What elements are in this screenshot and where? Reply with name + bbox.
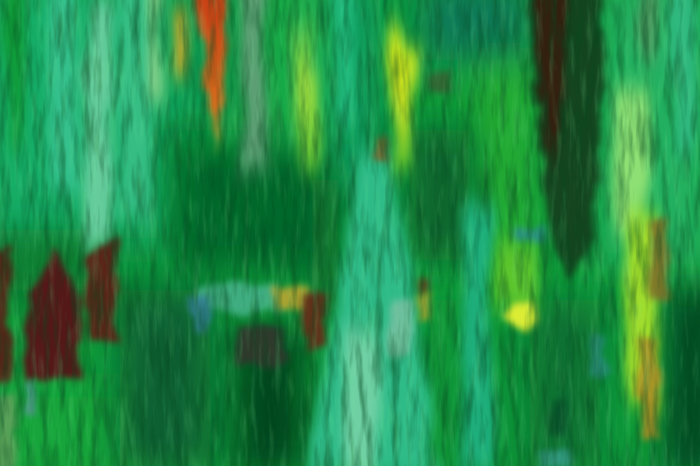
- patch: central teal and yellow band: [192, 284, 326, 366]
- brush streaks: yellow green strokes: [168, 5, 658, 405]
- stroke: dark brown column: [530, 0, 604, 280]
- stroke: right side brown and orange: [640, 218, 668, 440]
- region: central teal streak: [305, 150, 492, 466]
- details: small accents: [0, 72, 606, 466]
- stroke: orange red streak: [194, 0, 228, 155]
- patches: dark red on left: [0, 236, 118, 380]
- brush streaks: upper left pale strokes: [8, 0, 696, 250]
- blob: yellow highlight: [507, 302, 535, 330]
- region: dark middle and lower shading: [0, 130, 700, 466]
